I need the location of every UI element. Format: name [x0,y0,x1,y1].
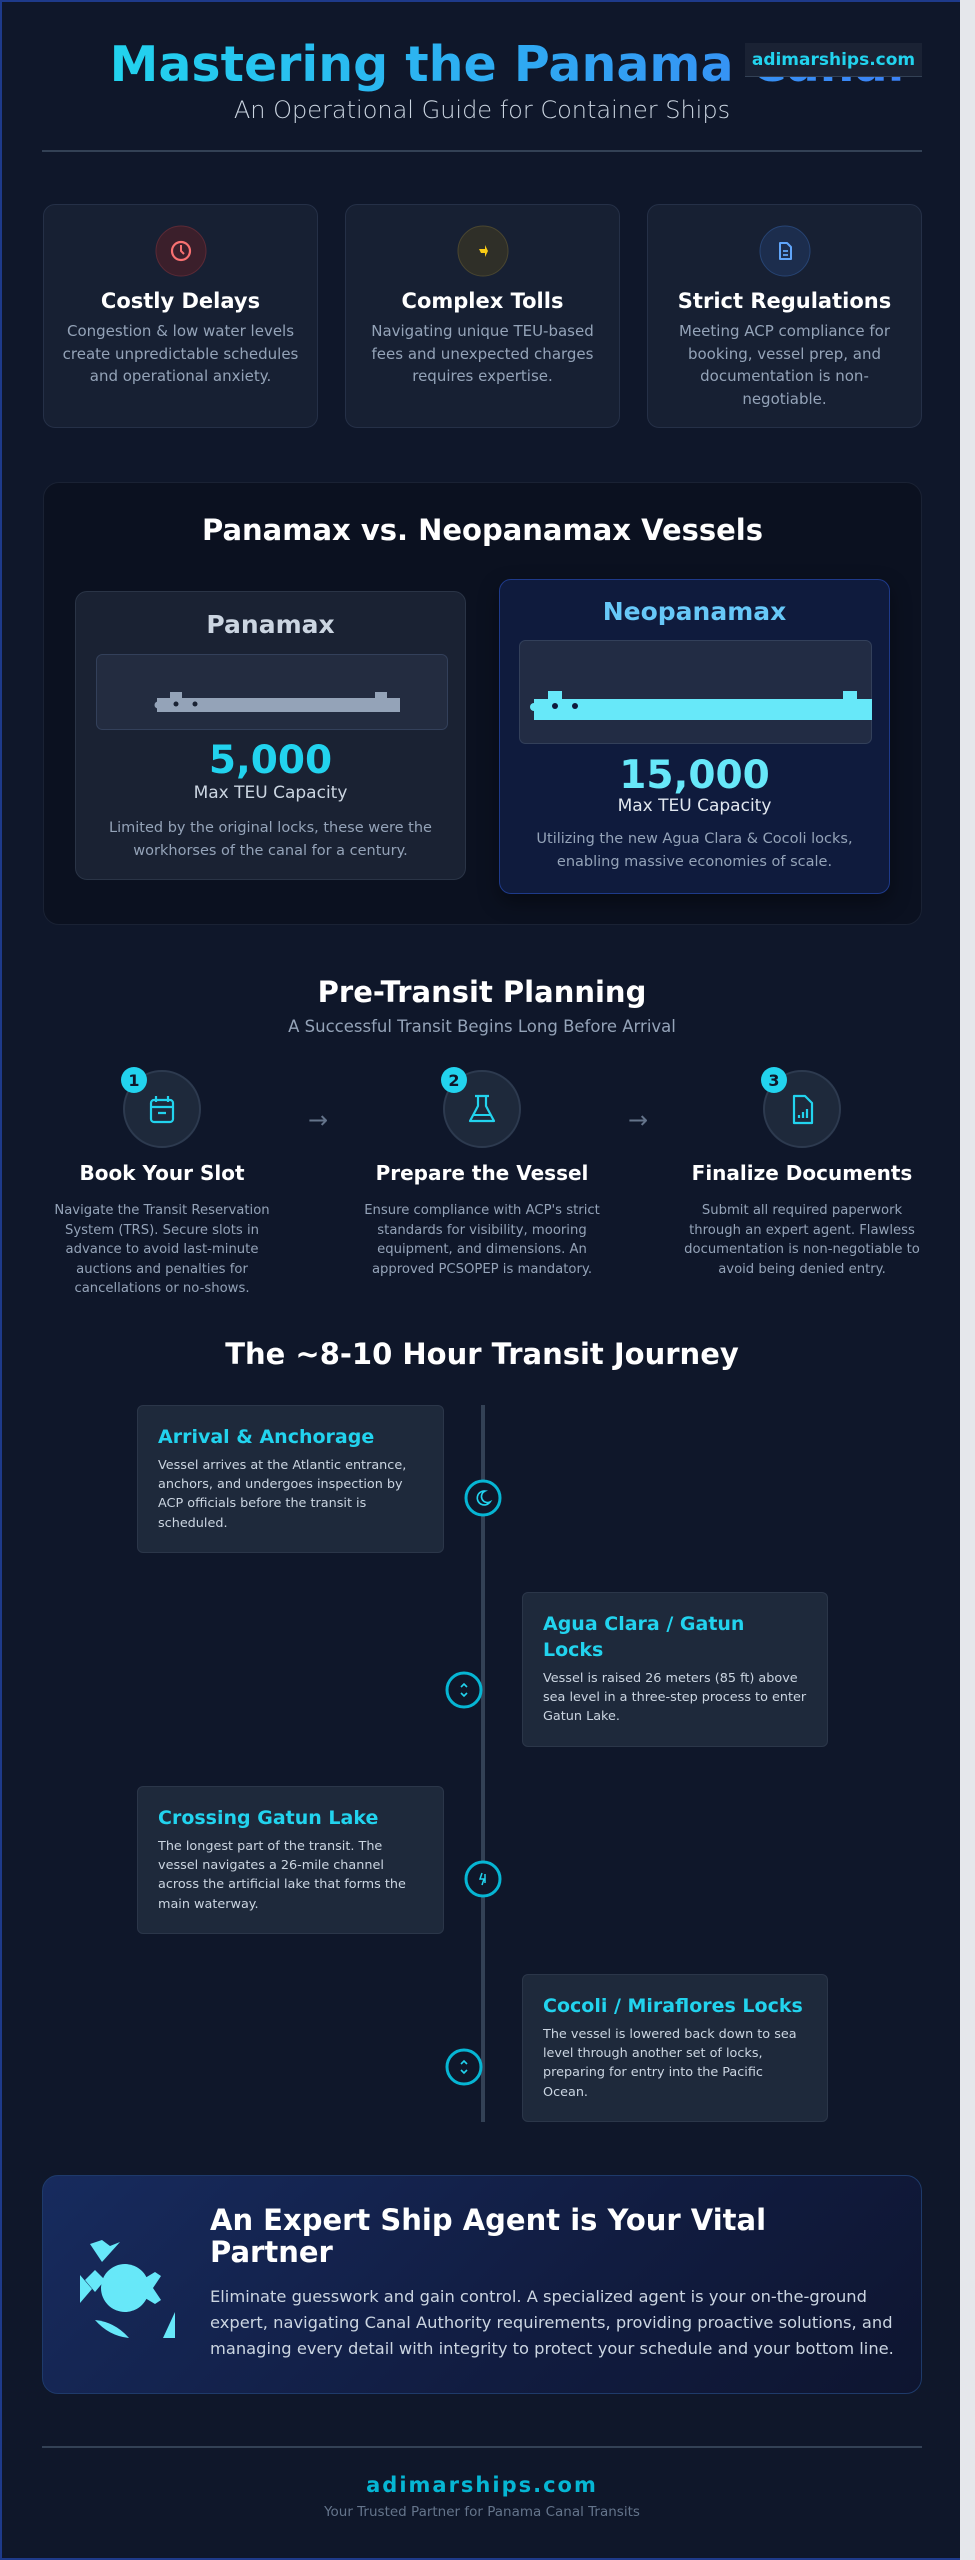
card: panamax: Max TEU Capacity [194,783,347,803]
card: panamax: Panamax [206,610,335,639]
step 2 text [364,1161,600,1276]
card: neopanamax: Neopanamax [603,597,786,626]
card: neopanamax: Max TEU Capacity [618,796,771,816]
panel: costly delays: Congestion & low water levels create unpredictable schedules and operational anxiety. [63,322,298,385]
icon: up-down [446,2048,482,2086]
heading: transit journey: The ~8-10 Hour Transit Journey [225,1337,739,1371]
footer tagline: Your Trusted Partner for Panama Canal Transits [324,2504,640,2520]
badge: website [745,43,922,77]
timeline card: arrival [137,1405,444,1553]
icon: agent emblem [80,2240,175,2338]
timeline card: cocoli [522,1974,828,2122]
paragraph: Eliminate guesswork and gain control. A specialized agent is your on-the-ground expert, navigating Canal Authority requirements, providing proactive solutions, and managing every detail with integrity to protect your schedule and your bottom line. [210,2287,894,2358]
panel: expert agent callout [42,2175,922,2394]
icon: moon [464,1480,502,1516]
step 2 text: Ensure compliance with ACP's strict standards for visibility, mooring equipment, and dimensions. An approved PCSOPEP is mandatory. [364,1203,600,1276]
card: neopanamax: Utilizing the new Agua Clara & Cocoli locks, enabling massive economies of scale. [536,831,853,870]
step 3 icon [761,1067,841,1148]
icon: coin [458,226,508,276]
timeline line [481,1405,485,2122]
timeline card: gatun lake: The longest part of the transit. The vessel navigates a 26-mile channel across the artificial lake that forms the main waterway. [158,1839,406,1912]
timeline card: arrival: Arrival & Anchorage [158,1426,374,1448]
step 1 text [54,1161,270,1296]
step 1 text: Navigate the Transit Reservation System (TRS). Secure slots in advance to avoid last-minute auctions and penalties for cancellations or no-shows. [54,1203,270,1296]
timeline card: arrival: Vessel arrives at the Atlantic entrance, anchors, and undergoes inspection by ACP officials before the transit is scheduled. [158,1458,406,1531]
icon: up-down [446,1672,482,1708]
card: neopanamax [499,579,890,894]
badge: website: adimarships.com [752,50,915,70]
ship illustration: panamax [96,654,448,730]
timeline card: agua clara: Vessel is raised 26 meters (85 ft) above sea level in a three-step process to enter Gatun Lake. [543,1671,806,1724]
step 2 icon: 2 [448,1071,460,1090]
footer brand: adimarships.com [366,2473,598,2497]
ship illustration: neopanamax [519,640,872,744]
step 3 text: Finalize Documents [692,1161,912,1185]
title: Mastering the Panama Canal [110,36,904,93]
panel: complex tolls: Complex Tolls [402,289,563,313]
heading: pre-transit planning: Pre-Transit Planning [318,975,646,1009]
arrow: → [308,1106,328,1134]
icon: water [464,1860,502,1898]
panel: strict regulations [647,204,922,428]
step 3 icon: 3 [768,1071,780,1090]
step 1 icon: 1 [128,1071,140,1090]
card: panamax [75,591,466,880]
timeline card: gatun lake [137,1786,444,1934]
timeline card: cocoli: Cocoli / Miraflores Locks [543,1995,803,2017]
arrow: → [628,1106,648,1134]
icon: document [760,226,810,276]
panel: vessel comparison [43,482,922,925]
subheading: A Successful Transit Begins Long Before Arrival [288,1017,676,1036]
card: neopanamax: 15,000 [619,753,770,798]
card: panamax: Limited by the original locks, these were the workhorses of the canal for a century. [109,820,432,858]
step 3 text [684,1161,920,1276]
panel: complex tolls [345,204,620,428]
icon: clock [156,226,206,276]
step 3 text: Submit all required paperwork through an expert agent. Flawless documentation is non-negotiable to avoid being denied entry. [684,1203,920,1276]
step 1 icon [121,1067,201,1148]
step 2 icon [441,1067,521,1148]
step 2 text: Prepare the Vessel [376,1161,588,1185]
heading: Panamax vs. Neopanamax Vessels [202,513,763,547]
heading: An Expert Ship Agent is Your Vital Partner [210,2203,766,2269]
card: panamax: 5,000 [209,738,332,783]
timeline card: agua clara: Agua Clara / Gatun Locks [543,1613,744,1661]
panel: complex tolls: Navigating unique TEU-based fees and unexpected charges requires expertise. [371,322,594,385]
panel: strict regulations: Meeting ACP compliance for booking, vessel prep, and documentation is non-negotiable. [679,322,890,408]
timeline card: gatun lake: Crossing Gatun Lake [158,1807,378,1829]
panel: costly delays [43,204,318,428]
subtitle: An Operational Guide for Container Ships [234,96,730,124]
panel: strict regulations: Strict Regulations [678,289,891,313]
timeline card: agua clara [522,1592,828,1747]
timeline card: cocoli: The vessel is lowered back down to sea level through another set of locks, preparing for entry into the Pacific Ocean. [543,2027,797,2100]
step 1 text: Book Your Slot [80,1161,244,1185]
panel: costly delays: Costly Delays [101,289,260,313]
